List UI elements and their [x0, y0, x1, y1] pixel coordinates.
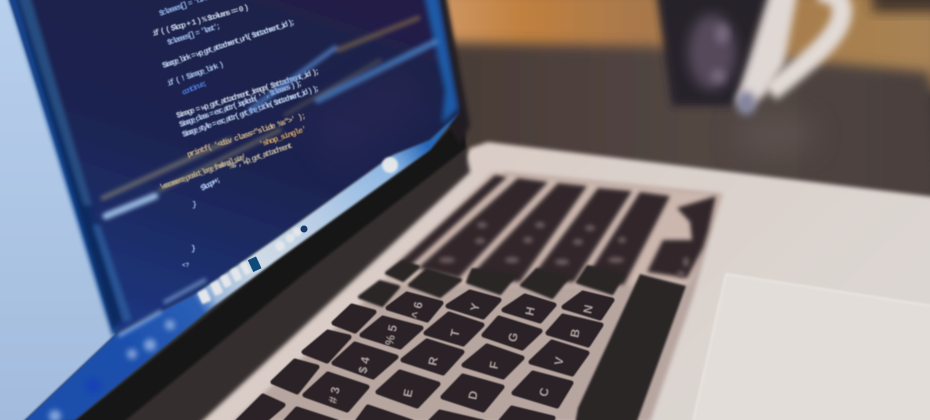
editor right glow [424, 0, 458, 124]
key labels: R [425, 355, 441, 367]
trackpad [693, 274, 930, 420]
code text: $image_link = wp_get_attachment_url( $attachment_id ); [161, 18, 297, 71]
background: table [440, 42, 930, 215]
background: table sheen [735, 115, 815, 155]
key labels: C [536, 386, 552, 398]
key labels: F [486, 360, 502, 370]
key labels: # 3 [326, 385, 343, 405]
code text: $image = wp_get_attachment_image( $attachment_id ); [175, 67, 321, 121]
far key legends [439, 222, 689, 277]
code text [151, 0, 321, 269]
key labels: D [465, 389, 481, 401]
code text: '%s', wp_get_attachment [225, 141, 294, 173]
icon: coffee mug [656, 0, 842, 115]
code text: continue; [181, 79, 209, 98]
blurred far code lines [103, 18, 435, 335]
key labels [326, 300, 596, 405]
key labels: E [400, 388, 416, 399]
key labels: Y [467, 302, 483, 313]
keyboard well [232, 172, 722, 420]
panel: code editor [8, 0, 460, 333]
key labels: $ 4 [356, 355, 373, 375]
code text: $classes[] = 'last'; [166, 22, 222, 48]
code text: if ( ! $image_link ) [166, 60, 226, 89]
key labels: G [505, 331, 521, 343]
near keyboard keys [237, 292, 612, 420]
key labels: T [447, 327, 463, 338]
code text: $image_style = esc_attr( get_the_title( $attachment_id ) ); [181, 84, 321, 140]
hinge and bezel [70, 115, 470, 420]
mid keyboard keys [360, 262, 623, 305]
screen reflection [300, 60, 430, 170]
code text: } [192, 201, 197, 210]
code text: 'shop_single' [258, 125, 308, 150]
far keyboard columns [388, 175, 716, 285]
editor gutter [8, 0, 132, 338]
panel: left window on screen [0, 0, 115, 420]
code text: } [191, 245, 196, 254]
background: wooden wall [420, 0, 930, 90]
right edge of lid [436, 0, 470, 145]
laptop body [190, 142, 930, 420]
key labels: ^ 6 [408, 300, 426, 320]
key labels: N [580, 303, 596, 315]
space bar [575, 274, 686, 420]
screen bottom: dock and status bar [20, 112, 460, 420]
code text: printf( '<div class="slide %s">' ); [186, 112, 307, 160]
code text: if ( ( $loop + 1 ) % $columns == 0 ) [151, 3, 250, 39]
code text: $image_class = esc_attr( implode( ' ', $classes ) ); [178, 79, 304, 130]
code text: $loop++; [199, 175, 223, 194]
key labels: H [522, 305, 538, 317]
key labels: B [567, 327, 583, 339]
code text: 'woocommerce_product_large_thumbnail_size', [158, 152, 250, 193]
key labels: V [551, 356, 567, 367]
key labels: % 5 [382, 323, 400, 347]
code text: <? [182, 262, 190, 269]
keyboard far gaps [380, 172, 722, 285]
background: dark object in corner [872, 0, 930, 12]
